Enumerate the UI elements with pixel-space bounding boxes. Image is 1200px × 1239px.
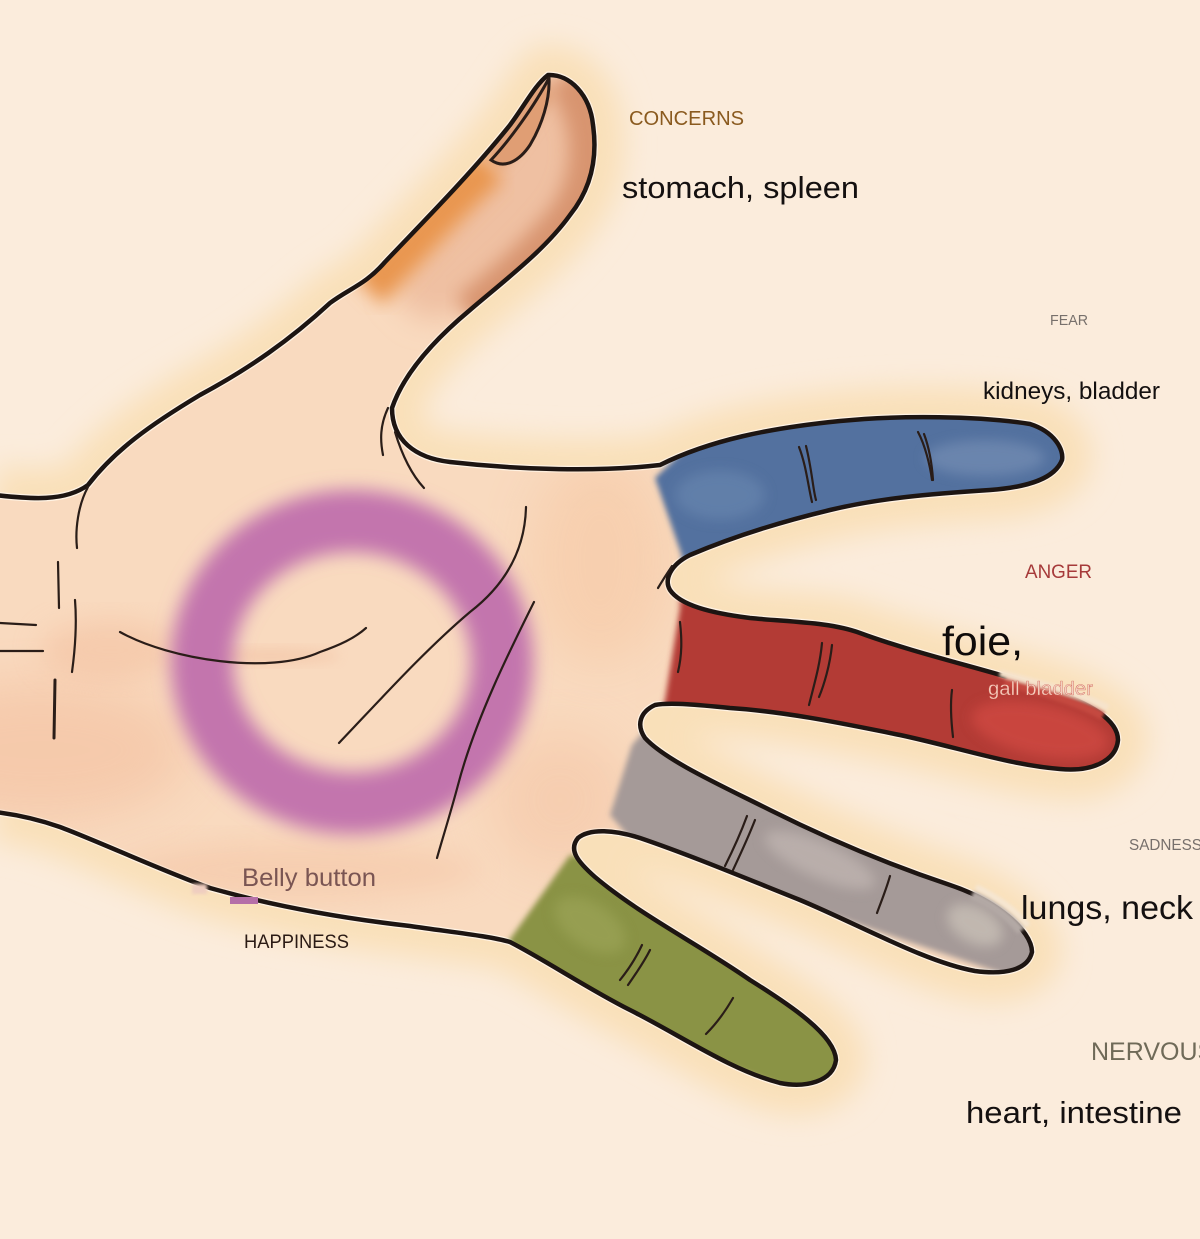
- label: kidneys, bladder: kidneys, bladder: [983, 378, 1160, 405]
- palm shading: [0, 70, 1135, 1105]
- palm and finger lines: [0, 78, 953, 1034]
- palm: [0, 75, 1118, 1085]
- thumb shading: [396, 77, 574, 332]
- label: stomach, spleen: stomach, spleen: [622, 170, 859, 205]
- finger: ring grey: [608, 732, 1030, 970]
- purple ring: belly button zone: [202, 521, 502, 803]
- erased outline on grey finger: [972, 887, 1028, 931]
- hand glow: [0, 75, 1118, 1085]
- hand outline: [0, 75, 1118, 1085]
- finger: index blue: [652, 419, 1060, 560]
- finger: middle red: [659, 599, 1116, 768]
- label: happiness: HAPPINESS: [244, 931, 349, 953]
- label: anger: ANGER: [1025, 562, 1092, 583]
- belly button artefacts: [192, 884, 258, 904]
- erased outline on red finger: [1000, 673, 1108, 716]
- hand illustration: [0, 70, 1135, 1105]
- finger: little olive: [506, 852, 834, 1082]
- label: lungs, neck: lungs, neck: [1021, 889, 1194, 926]
- label: belly button: Belly button: [242, 864, 376, 892]
- label: heart, intestine: heart, intestine: [966, 1095, 1182, 1130]
- thumbnail fill: [491, 78, 549, 164]
- label: fear: FEAR: [1050, 312, 1088, 329]
- label: gall bladder: gall bladder: [988, 679, 1094, 700]
- label: foie: foie,: [942, 618, 1023, 664]
- label: concerns: CONCERNS: [629, 108, 744, 130]
